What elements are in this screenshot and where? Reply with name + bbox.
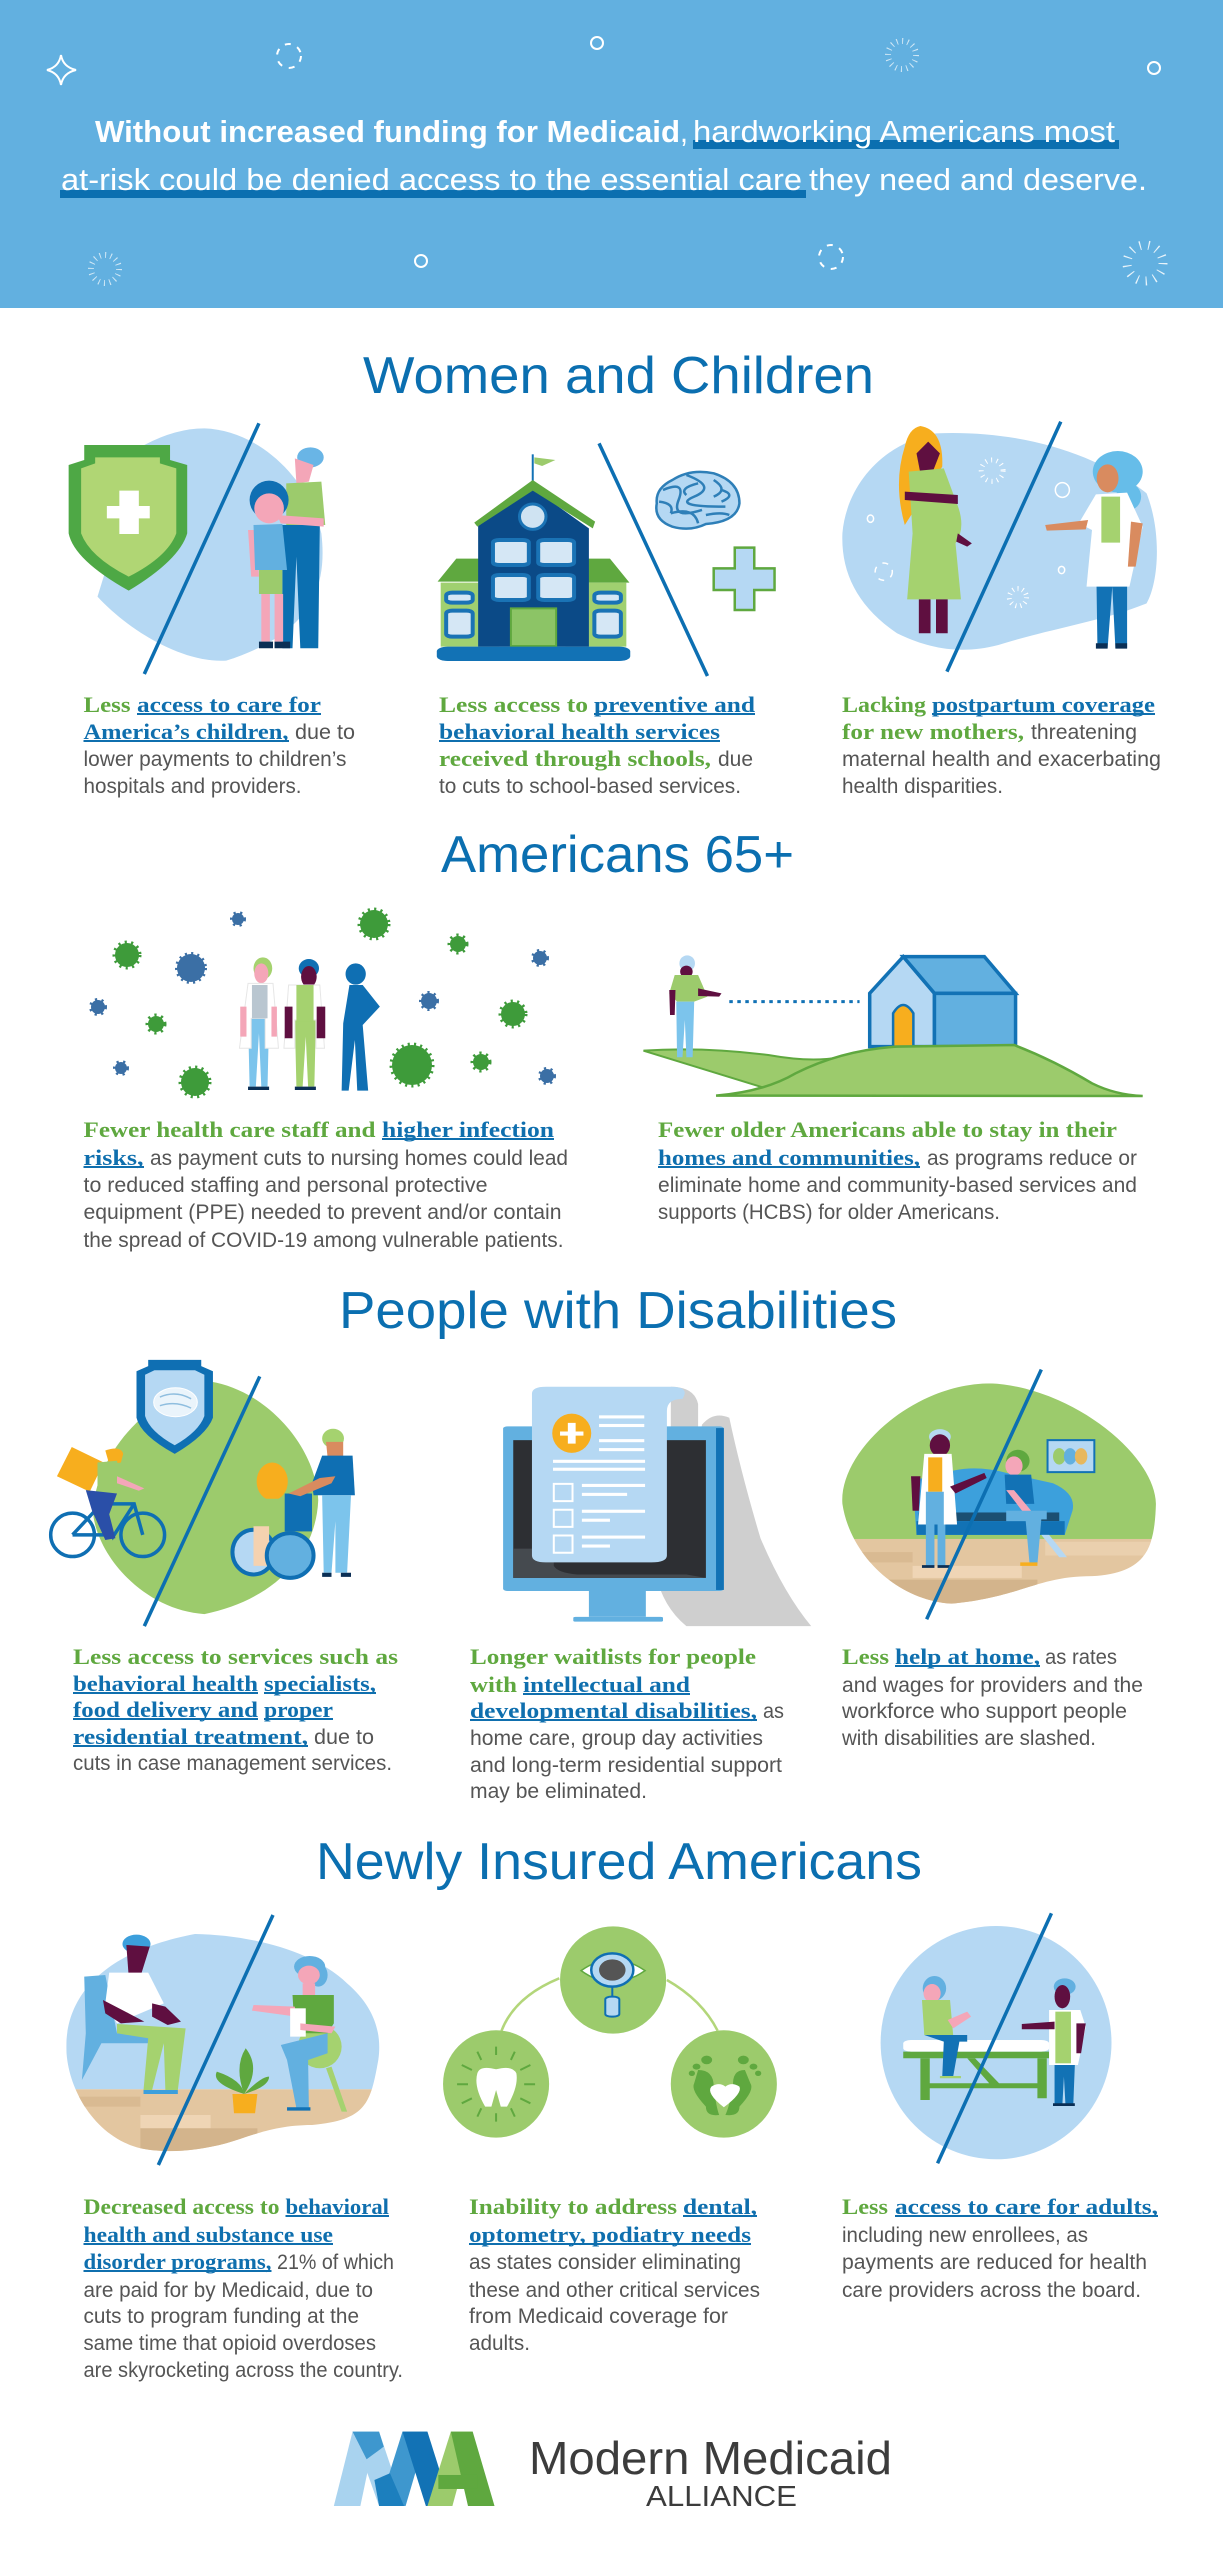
icon: person looking at distant home on hill: [644, 955, 1143, 1096]
text: behavioral health programs: behavioral: [286, 2194, 389, 2219]
text: new mothers: for new mothers,: [842, 719, 1024, 744]
text: staff and infection: Fewer health care staff and: [84, 1117, 376, 1142]
icon: home visit on sofa: [835, 1370, 1162, 1619]
text: children: Less: [84, 692, 131, 717]
text: staff and infection: as payment cuts to nursing homes could lead: [150, 1147, 568, 1170]
text: behavioral health programs: health and substance use: [84, 2222, 333, 2247]
text: care for adults: [842, 2194, 1158, 2302]
text: behavioral health programs: Decreased access to: [84, 2194, 280, 2219]
text: waitlists: intellectual and: [523, 1672, 690, 1697]
text: homes and communities: eliminate home and community-based services and: [658, 1174, 1137, 1197]
text: staff and infection: risks,: [84, 1145, 144, 1170]
text: help at home: as rates: [1045, 1646, 1117, 1669]
heading: Women and Children: Women and Children: [363, 347, 874, 405]
text: help at home: Less: [842, 1644, 889, 1669]
text: new mothers: health disparities.: [842, 775, 1003, 798]
text: behavioral health programs: cuts to program funding at the: [84, 2305, 359, 2328]
text: waitlists: and long-term residential support: [470, 1754, 782, 1777]
text: schools: received through schools,: [439, 746, 711, 771]
text: help at home: workforce who support people: [841, 1700, 1127, 1723]
header banner: ,: [680, 114, 688, 149]
text: waitlists: may be eliminated.: [470, 1780, 647, 1803]
text: children: lower payments to children’s: [84, 748, 346, 771]
text: behavioral health programs: 21% of which: [277, 2251, 394, 2274]
text: children: [84, 692, 355, 798]
heading: Americans 65+: Americans 65+: [441, 826, 794, 884]
text: dental optometry podiatry: as states consider eliminating: [469, 2251, 741, 2274]
icon: eye, tooth and feet: [443, 1926, 777, 2138]
text: behavioral health programs: are skyrocketing across the country.: [84, 2359, 403, 2382]
text: homes and communities: Fewer older Americans able to stay in their: [658, 1117, 1117, 1142]
text: dental optometry podiatry: [469, 2194, 760, 2355]
icon: patient on exam table with doctor: [881, 1913, 1112, 2163]
text: waitlists: with: [470, 1672, 517, 1697]
text: dental optometry podiatry: from Medicaid coverage for: [469, 2305, 728, 2328]
text: care for adults: including new enrollees, as: [842, 2224, 1088, 2247]
text: staff and infection: [84, 1117, 568, 1252]
text: dental optometry podiatry: Inability to address: [469, 2194, 677, 2219]
header banner: at-risk could be denied access to the essential care: [61, 162, 802, 197]
text: schools: Less access to: [439, 692, 588, 717]
text: schools: preventive and: [594, 692, 755, 717]
text: services: food delivery and: [73, 1697, 258, 1722]
header banner: hardworking Americans most: [693, 114, 1115, 149]
text: schools: due: [718, 748, 753, 771]
text: schools: behavioral health services: [439, 719, 720, 744]
text: schools: [439, 692, 755, 798]
text: help at home: and wages for providers and the: [842, 1674, 1143, 1697]
logo: Modern Medicaid Alliance: Modern Medicaid: [529, 2432, 892, 2484]
text: new mothers: Lacking: [842, 692, 926, 717]
text: care for adults: access to care for adults,: [895, 2194, 1158, 2219]
text: staff and infection: equipment (PPE) needed to prevent and/or contain: [84, 1201, 562, 1224]
text: children: hospitals and providers.: [84, 775, 302, 798]
text: staff and infection: higher infection: [382, 1117, 554, 1142]
text: new mothers: postpartum coverage: [932, 692, 1155, 717]
heading: Newly Insured Americans: Newly Insured Americans: [316, 1833, 922, 1891]
text: new mothers: maternal health and exacerbating: [842, 748, 1161, 771]
icon: school, brain and cross: [437, 443, 775, 676]
text: dental optometry podiatry: these and other critical services: [469, 2279, 760, 2302]
text: new mothers: [842, 692, 1161, 798]
icon: delivery cyclist, shield and wheelchair: [51, 1360, 355, 1626]
logo: Modern Medicaid Alliance: [334, 2432, 892, 2513]
text: homes and communities: homes and communities,: [658, 1145, 920, 1170]
text: new mothers: threatening: [1031, 721, 1137, 744]
icon: shield, parent and child: [69, 423, 325, 674]
text: schools: to cuts to school-based services.: [439, 775, 741, 798]
icon: counselling session: [62, 1915, 386, 2165]
text: dental optometry podiatry: adults.: [469, 2332, 530, 2355]
logo: Modern Medicaid Alliance: ALLIANCE: [646, 2481, 797, 2513]
text: help at home: [841, 1644, 1143, 1750]
text: services: specialists,: [264, 1671, 376, 1696]
text: help at home: help at home,: [895, 1644, 1040, 1669]
text: staff and infection: to reduced staffing and personal protective: [84, 1174, 487, 1197]
text: behavioral health programs: same time that opioid overdoses: [84, 2332, 376, 2355]
text: dental optometry podiatry: dental,: [683, 2194, 757, 2219]
logo mark: [334, 2432, 495, 2506]
text: staff and infection: the spread of COVID-19 among vulnerable patients.: [84, 1229, 564, 1252]
text: help at home: with disabilities are slashed.: [841, 1727, 1096, 1750]
header banner: they need and deserve.: [809, 162, 1147, 197]
text: children: access to care for: [137, 692, 321, 717]
text: homes and communities: [658, 1117, 1137, 1224]
header banner: Without increased funding for Medicaid: [95, 114, 680, 149]
text: children: due to: [295, 721, 355, 744]
icon: pregnant woman and doctor: [842, 422, 1157, 672]
text: behavioral health programs: [84, 2194, 403, 2382]
text: care for adults: care providers across the board.: [842, 2279, 1141, 2302]
text: services: [73, 1644, 398, 1775]
text: waitlists: developmental disabilities,: [470, 1698, 757, 1723]
text: homes and communities: supports (HCBS) for older Americans.: [658, 1201, 1000, 1224]
text: children: America’s children,: [84, 719, 288, 744]
heading: People with Disabilities: People with Disabilities: [339, 1282, 897, 1340]
text: behavioral health programs: disorder programs,: [84, 2249, 272, 2274]
text: care for adults: payments are reduced for health: [842, 2251, 1147, 2274]
icon: monitor with long waitlist scroll: [503, 1387, 811, 1626]
text: waitlists: home care, group day activities: [470, 1727, 763, 1750]
icon: health workers and viruses: [91, 910, 554, 1096]
text: waitlists: [470, 1644, 784, 1803]
text: waitlists: Longer waitlists for people: [470, 1644, 756, 1669]
text: behavioral health programs: are paid for by Medicaid, due to: [84, 2279, 373, 2302]
header banner: [0, 0, 1223, 308]
text: services: cuts in case management services.: [73, 1752, 392, 1775]
text: care for adults: Less: [842, 2194, 888, 2219]
text: waitlists: as: [763, 1700, 784, 1723]
text: services: due to: [314, 1726, 374, 1749]
text: homes and communities: as programs reduce or: [927, 1147, 1137, 1170]
text: services: behavioral health: [73, 1671, 258, 1696]
text: dental optometry podiatry: optometry, podiatry needs: [469, 2222, 752, 2247]
text: services: Less access to services such as: [73, 1644, 398, 1669]
text: services: residential treatment,: [73, 1724, 308, 1749]
text: services: proper: [264, 1697, 333, 1722]
